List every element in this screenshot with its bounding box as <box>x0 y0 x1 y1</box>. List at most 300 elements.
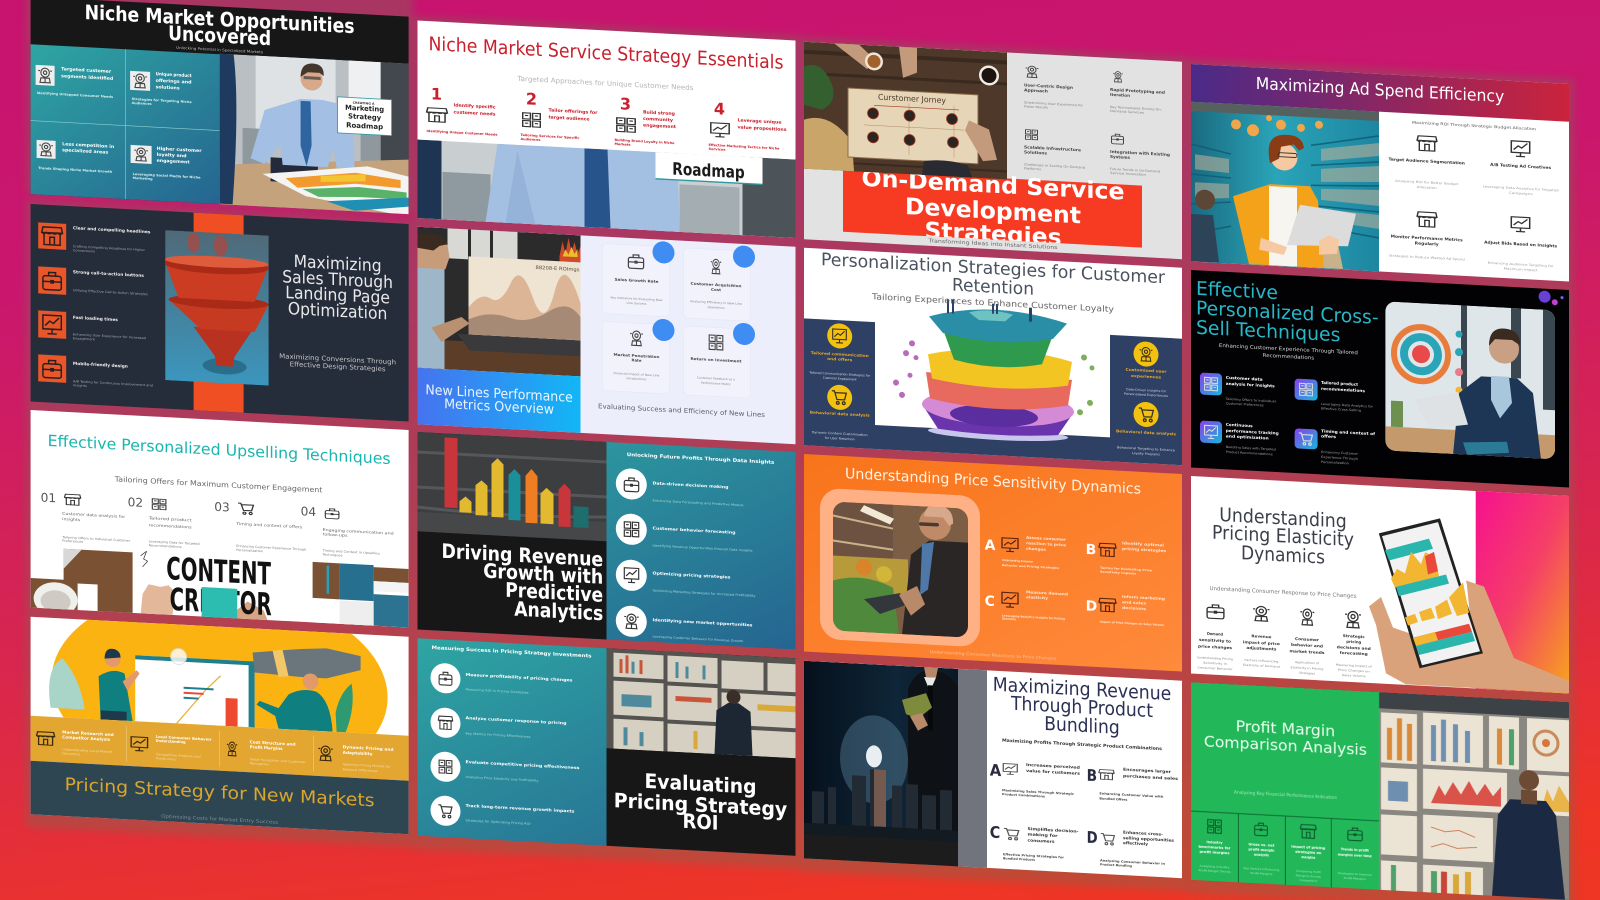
item: customer data: Customer Preferences <box>1226 401 1264 407</box>
item: customized experiences: Personalized Experiences <box>1124 392 1168 398</box>
column: gross vs net: analysis <box>1254 853 1269 857</box>
step 3: Build strong <box>643 109 675 117</box>
item: mobile-friendly: A/B Testing for Continuous Improvement and <box>73 379 153 387</box>
blue title panel <box>418 368 580 433</box>
title <box>993 674 1171 742</box>
photo: customer journey board on wooden table <box>804 42 1007 180</box>
item: continuous tracking <box>1200 420 1279 457</box>
item C <box>990 823 1079 864</box>
subtitle: Understanding Consumer Response to Price Changes <box>1210 586 1357 600</box>
item: mobile-friendly: Insights <box>73 383 87 388</box>
item: data-driven <box>616 468 744 507</box>
item D: decisions <box>1122 605 1147 611</box>
step 2: Audiences <box>520 137 541 142</box>
step 04: 04 <box>301 504 316 519</box>
step 3 <box>614 94 676 149</box>
item: scalable infrastructure: Solutions <box>1024 149 1048 156</box>
item: timing and context: Enhancing Customer <box>1321 450 1359 456</box>
footer subtitle: Understanding Consumer Reactions to Price Changes <box>930 649 1056 661</box>
title <box>425 382 573 419</box>
photo: blurred consultant with roadmap sign <box>418 140 796 238</box>
step 2: Tailoring Services for Specific <box>520 133 580 140</box>
photo: man at marketing roadmap table: Roadmap <box>346 121 383 131</box>
title: Optimization <box>288 299 387 324</box>
step 03 <box>214 500 306 556</box>
photo: bar chart on chalkboard <box>418 432 606 542</box>
item D: D <box>1086 598 1097 615</box>
card: return on investment: Return on Investment <box>690 357 742 364</box>
item: scalable infrastructure: Challenges in Scaling On-Demand <box>1024 162 1085 170</box>
item C: Simplifies decision- <box>1027 826 1079 834</box>
column: demand sensitivity <box>1197 604 1234 671</box>
item: rapid prototyping: Key Technologies Driving On- <box>1110 105 1162 112</box>
item B: Bundled Offers <box>1099 796 1128 802</box>
item A: reaction to price <box>1026 540 1066 547</box>
item A: Behavior and Pricing Strategies <box>1002 563 1059 570</box>
column: industry benchmarks: profit margins <box>1199 850 1230 855</box>
gold band <box>31 716 409 781</box>
item: loading times <box>38 310 146 344</box>
title: Maximizing Ad Spend Efficiency <box>1256 74 1504 106</box>
title: Comparison Analysis <box>1204 732 1367 759</box>
item: A/B testing: Leveraging Data Analytics for Targeted <box>1483 184 1559 192</box>
card: market penetration: Introductions <box>626 376 647 381</box>
item: loading times: Engagement <box>73 336 96 341</box>
subtitle: Evaluating Success and Efficiency of New Lines <box>598 402 766 419</box>
dark title band <box>31 761 409 834</box>
item: scalable infrastructure <box>1024 130 1085 174</box>
item: unique offerings <box>130 70 192 108</box>
item: pricing strategies: Optimizing Marketing Strategies for Increased Profitability <box>652 588 756 598</box>
title: Predictive <box>505 578 603 607</box>
card: market penetration: Market Penetration <box>614 353 660 359</box>
step 3: 3 <box>620 94 631 114</box>
slide: Maximizing Sales Through Landing Page Optimization <box>31 204 409 421</box>
column: gross vs net <box>1243 822 1280 876</box>
step 2 <box>520 89 598 145</box>
item: unique offerings: Unique product <box>156 71 192 79</box>
step 3: Building Brand Loyalty in Niche <box>614 138 674 145</box>
column: industry benchmarks <box>1198 819 1231 874</box>
title: Personalization Strategies for Customer <box>821 250 1166 288</box>
item: customized experiences <box>1124 340 1168 398</box>
item: customer response: Analyze customer response to pricing <box>465 715 567 725</box>
item B: Tactics for Evaluating Price <box>1100 566 1152 572</box>
item C: Bundled Products <box>1003 856 1035 862</box>
item: market opportunities <box>616 605 753 644</box>
item: market research: Understanding Local Market <box>62 747 113 754</box>
card: market penetration: Financial Impact of New Line <box>614 371 660 378</box>
orange column <box>194 213 244 413</box>
title: On-Demand Service <box>862 166 1124 206</box>
column: industry benchmarks: benchmarks for <box>1198 845 1231 850</box>
item: cost structure: Perception <box>250 761 270 766</box>
column: industry benchmarks: Analyzing Industry <box>1199 864 1230 869</box>
column: gross vs net: Profit Margins <box>1250 871 1273 876</box>
item: mobile-friendly <box>38 354 153 391</box>
item D: Analyzing Consumer Behavior in <box>1100 858 1165 866</box>
slide: Maximizing Ad Spend Efficiency <box>1191 64 1569 282</box>
item: customer data: analysis for insights <box>1226 381 1275 388</box>
item: cost structure: Value Perception and Customer <box>250 757 306 764</box>
subtitle: Recommendations <box>1263 353 1315 362</box>
step 3: Markets <box>614 142 631 147</box>
column: impact of pricing: Margins Across <box>1296 873 1321 879</box>
gradient panel <box>1476 491 1569 693</box>
title: Landing Page <box>285 283 390 309</box>
item: tailored product: Leveraging Data Analytics for <box>1321 402 1374 409</box>
item: headlines: Clear and compelling headlines <box>73 225 151 234</box>
item C: making for <box>1027 832 1058 838</box>
slide: Understanding Price Sensitivity Dynamics <box>804 454 1182 671</box>
item: unique offerings: Strategies for Targeting Niche <box>132 97 192 104</box>
black title panel <box>418 432 606 639</box>
item: loading times: Fast loading times <box>73 315 118 322</box>
photo: red funnel <box>165 230 269 386</box>
slide: Profit Margin Comparison Analysis <box>1191 682 1569 900</box>
item: continuous tracking: Continuous <box>1226 422 1253 428</box>
photo: analyst with laptop <box>418 226 580 376</box>
subtitle: Transforming Ideas into Instant Solutions <box>927 238 1058 251</box>
item: user-centric: Faster Results <box>1024 104 1048 110</box>
title: Bundling <box>1044 713 1120 739</box>
item: A/B testing: Campaigns <box>1509 191 1533 196</box>
item D: Inform marketing <box>1122 594 1165 601</box>
item: integration <box>1110 134 1170 178</box>
item: timing and context: Personalization <box>1321 460 1349 465</box>
item: unique offerings: offerings and <box>156 78 192 86</box>
item: integration: Systems <box>1110 154 1131 160</box>
slide: Evaluating Pricing Strategy ROI <box>418 638 796 856</box>
subtitle: Optimizing Costs for Market Entry Success <box>161 814 279 826</box>
item: dynamic pricing: Adapting Pricing Models for <box>343 762 391 769</box>
slide: Personalization Strategies for Customer Retention <box>804 248 1182 465</box>
card: customer acquisition <box>690 258 742 311</box>
column: consumer behavior: Strategies <box>1299 671 1316 676</box>
item: data-driven: Enhancing Data Forecasting and Predictive Models <box>652 498 744 507</box>
title: Niche Market Service Strategy Essentials <box>428 33 784 74</box>
card: return on investment: Customer Feedback as a <box>697 375 735 382</box>
item: market opportunities: Identifying new market opportunities <box>652 617 753 627</box>
item: behavioral analysis left: Dynamic Content Customization <box>812 430 868 437</box>
step 4: value propositions <box>738 124 787 133</box>
column: consumer behavior <box>1290 608 1325 676</box>
column: impact of pricing: Impact of pricing <box>1291 845 1326 850</box>
step 4: Services <box>708 147 726 152</box>
column: strategic pricing <box>1336 611 1373 679</box>
title <box>862 166 1124 251</box>
item: tailored communication: Tailored communication <box>811 350 869 358</box>
item A: Maximizing Sales Through Strategic <box>1002 788 1074 796</box>
slide: Pricing Strategy for New Markets <box>31 579 409 834</box>
step 02: recommendations <box>149 522 192 530</box>
item D <box>1086 592 1165 627</box>
photo: executive at dashboard wall <box>1378 692 1569 900</box>
item: headlines <box>38 222 151 256</box>
item: dynamic pricing: Regional Differences <box>343 767 378 773</box>
item: higher loyalty: engagement <box>157 158 190 166</box>
slide: Effective Personalized Upselling Techniques <box>31 410 409 635</box>
item: behavioral analysis left <box>810 383 871 442</box>
item: profitability: Measure profitability of pricing changes <box>465 672 573 683</box>
column: demand sensitivity: sensitivity to <box>1199 637 1231 644</box>
item B: Identify optimal <box>1122 540 1164 548</box>
photo: content creator desk: CREATOR <box>170 582 272 623</box>
item: rapid prototyping: Rapid Prototyping and <box>1110 87 1165 95</box>
item A: A <box>990 761 1002 780</box>
step 3: engagement <box>643 122 676 130</box>
item: behavioral analysis right <box>1116 400 1177 457</box>
item B: Sensitivity Impacts <box>1100 570 1136 576</box>
step 1: 1 <box>431 84 442 104</box>
item: behavioral analysis left: Behavioral data analysis <box>810 410 871 418</box>
column: impact of pricing <box>1291 824 1326 883</box>
title: Effective <box>1196 278 1278 304</box>
column: consumer behavior: Applications of <box>1295 660 1320 665</box>
step 1: customer needs <box>454 109 496 118</box>
illustration: hand holding phone <box>1369 515 1569 693</box>
item: timing and context <box>1295 427 1375 467</box>
title <box>442 539 603 625</box>
item: profitability: Measuring ROI in Pricing Strategies <box>465 687 529 695</box>
subtitle: Tailoring Offers for Maximum Customer Engagement <box>114 474 323 494</box>
item B <box>1086 538 1167 577</box>
item: customized experiences: experiences <box>1131 373 1162 380</box>
step 04: follow-ups <box>323 531 348 538</box>
step 4: 4 <box>714 99 725 119</box>
item: local consumer <box>131 734 212 763</box>
item: competitive effectiveness: Analyzing Price Elasticity and Profitability <box>465 775 539 783</box>
subtitle: Unlocking Potential in Specialized Markets <box>176 46 263 54</box>
item: higher loyalty <box>131 144 203 184</box>
item: headlines: Conversions <box>73 248 95 253</box>
item C: Effective Pricing Strategies for <box>1003 852 1065 859</box>
item: monitor metrics: Monitor Performance Metrics <box>1391 234 1463 242</box>
title: Evaluating <box>644 769 756 799</box>
column: demand sensitivity: Demand <box>1207 631 1223 637</box>
title: Growth with <box>483 558 603 589</box>
card: customer acquisition: Customer Acquisition <box>690 282 742 288</box>
funnel illustration <box>893 296 1094 445</box>
item: cost structure: Cost Structure and <box>250 739 296 747</box>
photo: man at marketing roadmap table: Strategy <box>348 112 382 122</box>
item D: D <box>1087 828 1098 847</box>
item: behavior forecasting <box>616 513 753 553</box>
photo: customer journey board on wooden table: Curstomer Jorney <box>878 93 946 105</box>
title: Understanding Price Sensitivity Dynamics <box>845 466 1141 498</box>
title: Through Product <box>1010 693 1153 722</box>
item: target audience: Allocation <box>1417 185 1437 190</box>
navy panels <box>804 318 1182 465</box>
title: Personalized Cross- <box>1196 297 1379 329</box>
step 02: Tailored product <box>147 515 192 523</box>
column: strategic pricing: Strategic <box>1343 633 1365 639</box>
step 4 <box>708 99 787 155</box>
column: trends over time: margins over time <box>1338 853 1372 858</box>
slide: Niche Market Opportunities Uncovered <box>31 0 409 215</box>
item A: Understanding Consumer <box>1002 558 1033 564</box>
item C: C <box>985 594 995 610</box>
item D: Enhances cross- <box>1123 830 1163 837</box>
title: Maximizing Revenue <box>993 674 1171 705</box>
item C: Leveraging Analytics Insights for Pricing <box>1002 613 1065 621</box>
step 4: Effective Marketing Tactics for Niche <box>708 143 779 151</box>
step 02: Recommendations <box>149 543 182 549</box>
item: rapid prototyping <box>1110 71 1165 116</box>
column: impact of pricing: margins <box>1301 855 1315 860</box>
heading: Measuring Success in Pricing Strategy Investments <box>432 645 592 660</box>
item: customer response <box>430 707 567 744</box>
item C: consumers <box>1027 838 1055 844</box>
column: strategic pricing: Sales Volume <box>1342 673 1366 678</box>
item: adjust bids: Maximum Impact <box>1504 267 1539 272</box>
title: Effective Personalized Upselling Techniques <box>48 432 391 468</box>
slide: Understanding Pricing Elasticity Dynamics <box>1191 476 1569 693</box>
photo: man at marketing roadmap table <box>220 54 409 214</box>
title: Strategies <box>924 218 1061 251</box>
item: behavioral analysis right: Behavioral data analysis <box>1116 428 1177 436</box>
item: customer data <box>1200 372 1276 408</box>
step 4: Leverage unique <box>738 117 782 126</box>
photo: blurred consultant with roadmap sign: Roadmap <box>672 159 745 183</box>
subtitle: Analyzing Key Financial Performance Indicators <box>1234 790 1337 800</box>
grid lines <box>31 44 220 204</box>
item B: pricing strategies <box>1122 546 1167 553</box>
item D <box>1087 828 1175 870</box>
item: target audience: Analyzing ROI for Better Budget <box>1395 179 1459 186</box>
item: targeted segments: segments identified <box>61 73 113 82</box>
title: Metrics Overview <box>444 396 554 418</box>
item: continuous tracking: Boosting Sales with Targeted <box>1226 445 1276 451</box>
item B: Enhancing Customer Value with <box>1099 791 1163 799</box>
item: dynamic pricing: Adaptability <box>343 750 373 756</box>
column: trends over time: Strategies to Improve <box>1338 871 1372 877</box>
column: gross vs net: Key Factors Influencing <box>1243 866 1280 872</box>
item: call-to-action: Utilizing Effective Call-to-Action Strategies <box>73 288 148 296</box>
item: rapid prototyping: Iteration <box>1110 92 1130 98</box>
illustration: team with telescope and chart <box>49 620 388 734</box>
column: revenue impact: impact of price <box>1243 639 1280 646</box>
title <box>1196 278 1379 348</box>
step 03: Timing and context of offers <box>235 521 302 529</box>
item: target audience <box>1388 134 1465 192</box>
item: integration: Future Trends in On-Demand <box>1110 167 1160 174</box>
slide: Driving Revenue Growth with Predictive Analytics <box>418 432 796 649</box>
title: Retention <box>952 276 1034 300</box>
item: local consumer: Positioning <box>156 756 176 761</box>
title: Driving Revenue <box>441 539 603 571</box>
decorative dots <box>1539 290 1564 306</box>
item: market opportunities: Leveraging Customer Behavior for Revenue Growth <box>652 634 744 643</box>
item A <box>985 533 1066 570</box>
item: user-centric: Approach <box>1024 87 1048 94</box>
heading: Unlocking Future Profits Through Data Insights <box>627 452 774 466</box>
item C <box>985 587 1068 624</box>
item D: selling opportunities <box>1123 835 1175 843</box>
item: cost structure: Profit Margins <box>250 744 283 751</box>
item: less competition: Trends Shaping Niche Market Growth <box>38 166 113 174</box>
column: trends over time <box>1338 827 1372 881</box>
item: scalable infrastructure: Scalable Infrastructure <box>1024 144 1081 152</box>
step 01: Customer data analysis for <box>62 511 126 519</box>
card: customer acquisition: Cost <box>711 288 721 292</box>
black title panel <box>606 648 796 856</box>
slide: Maximizing Revenue Through Product Bundling <box>804 661 1182 879</box>
item B: B <box>1086 542 1096 558</box>
column: consumer behavior: behavior and <box>1291 642 1323 648</box>
item: behavioral analysis left: for User Retention <box>825 436 855 441</box>
step 2: target audience <box>548 114 590 123</box>
step 04: Timing and Context in Upselling <box>321 548 380 555</box>
item: A/B testing: A/B Testing Ad Creatives <box>1490 162 1552 170</box>
title: Development <box>905 194 1081 229</box>
photo: man at marketing roadmap table: Marketing <box>345 104 384 114</box>
item: long-term growth: Track long-term revenue growth impacts <box>465 803 575 814</box>
item D: and sales <box>1122 599 1147 606</box>
column: revenue impact: Elasticity of Demand <box>1243 663 1280 669</box>
title: Uncovered <box>168 21 271 50</box>
column: consumer behavior: Elasticity in Pricing <box>1290 665 1324 671</box>
item: long-term growth: Strategies for Optimizing Pricing ROI <box>465 818 531 826</box>
column: strategic pricing: decisions and <box>1337 644 1371 651</box>
step 04: Engaging communication and <box>323 527 394 536</box>
step 01: Tailoring Offers to Individual Customer <box>61 535 131 543</box>
title <box>614 767 787 838</box>
item A: changes <box>1026 546 1047 552</box>
card: return on investment: Performance Metric <box>701 381 732 386</box>
card: sales growth <box>610 254 663 307</box>
item: local consumer: Understanding <box>156 739 186 744</box>
column: industry benchmarks: Profit Margin Trends <box>1198 868 1231 874</box>
step 01 <box>41 491 131 546</box>
item: tailored communication: Customer Engagement <box>823 376 857 382</box>
column: impact of pricing: Comparing Profit <box>1296 869 1322 874</box>
title: Sales Through <box>282 267 393 293</box>
column: trends over time: Trends in profit <box>1341 847 1369 853</box>
item: continuous tracking: performance tracking <box>1226 428 1279 436</box>
subtitle: Maximizing Conversions Through <box>279 352 396 366</box>
title <box>1212 504 1354 570</box>
item A: Product Combinations <box>1002 792 1045 798</box>
step 02: 02 <box>128 495 143 510</box>
item: tailored communication: and offers <box>827 356 853 362</box>
item C: Decisions <box>1002 616 1016 621</box>
item: customized experiences: Data-Driven Insights for <box>1126 387 1167 393</box>
item: customer data: Customer data <box>1226 375 1263 382</box>
subtitle: Targeted Approaches for Unique Customer Needs <box>516 75 694 92</box>
subtitle: Effective Design Strategies <box>290 360 386 373</box>
item: data-driven: Data-driven decision making <box>652 480 729 489</box>
item: long-term growth <box>430 795 575 833</box>
item: local consumer: Competitive Analysis and <box>156 752 201 759</box>
item: continuous tracking: and optimization <box>1226 433 1269 441</box>
cards <box>602 243 750 398</box>
column: industry benchmarks: Industry <box>1206 840 1223 845</box>
title: Pricing Strategy <box>614 788 787 821</box>
step 03: Personalization <box>236 548 263 553</box>
step 2: Tailor offerings for <box>548 107 598 116</box>
column: revenue impact <box>1243 606 1280 669</box>
item: loading times: Enhancing User Experience for Increased <box>73 332 146 340</box>
item: higher loyalty: loyalty and <box>157 152 187 159</box>
step 1: Identifying Unique Customer Needs <box>426 129 498 137</box>
item: continuous tracking: Product Recommendations <box>1226 450 1273 456</box>
card: return on investment <box>690 334 742 387</box>
column: demand sensitivity: Sensitivity in <box>1203 661 1227 666</box>
photo: businessman with glowing city <box>804 660 958 866</box>
slide: Niche Market Service Strategy Essentials <box>418 20 796 238</box>
item A: value for customers <box>1026 768 1081 776</box>
